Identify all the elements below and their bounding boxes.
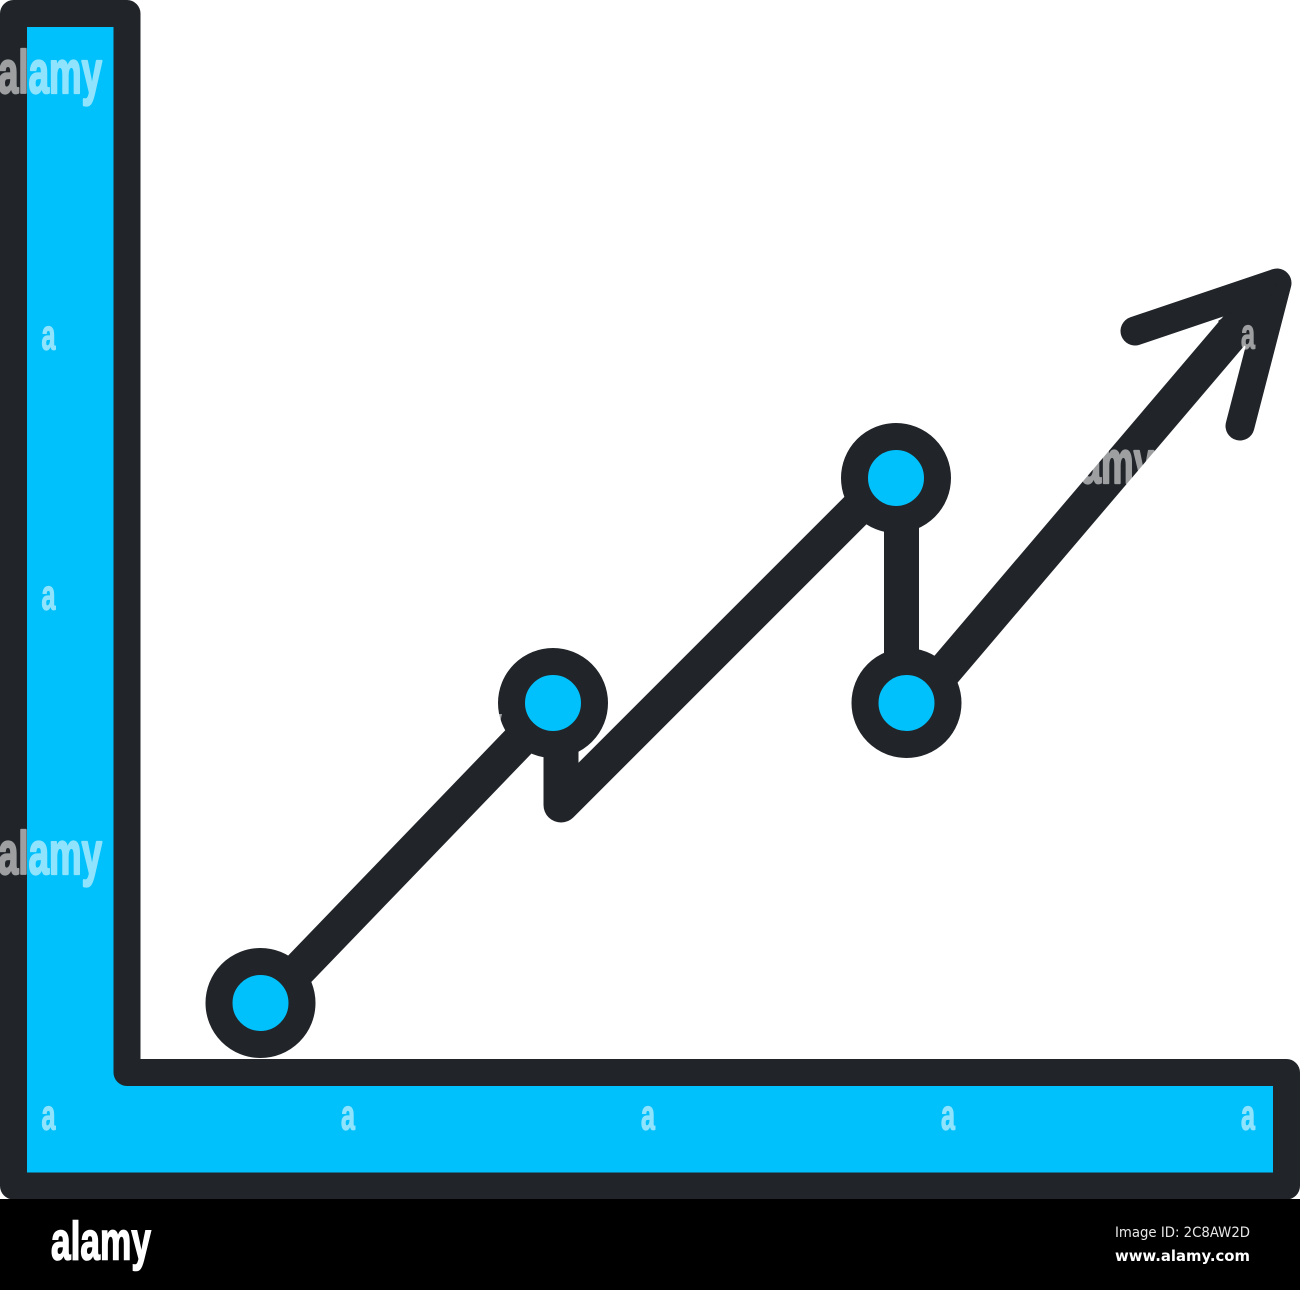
data point 1 [219, 962, 302, 1044]
data point 2 [512, 662, 594, 744]
data point 3 [854, 436, 938, 520]
watermarks: a [641, 1092, 656, 1140]
watermarks: a [941, 1092, 956, 1140]
watermarks: alamy [0, 39, 102, 106]
footer bar [0, 1199, 1300, 1290]
watermarks: a [1241, 310, 1256, 358]
watermarks: a [42, 312, 56, 360]
trend line [260, 298, 1262, 1010]
arrow head [1135, 283, 1277, 426]
watermarks: alamy [0, 820, 102, 887]
watermarks: alamy [1050, 429, 1154, 496]
image id: Image ID: 2C8AW2D [1115, 1225, 1250, 1241]
footer logo: alamy [51, 1212, 151, 1272]
watermarks: a [42, 1092, 56, 1140]
website: www.alamy.com [1115, 1247, 1250, 1265]
watermarks: a [42, 572, 56, 620]
watermarks: alamy [402, 672, 506, 739]
watermarks: a [341, 1092, 356, 1140]
watermarks: a [1241, 1092, 1256, 1140]
data point 4 [865, 662, 948, 744]
